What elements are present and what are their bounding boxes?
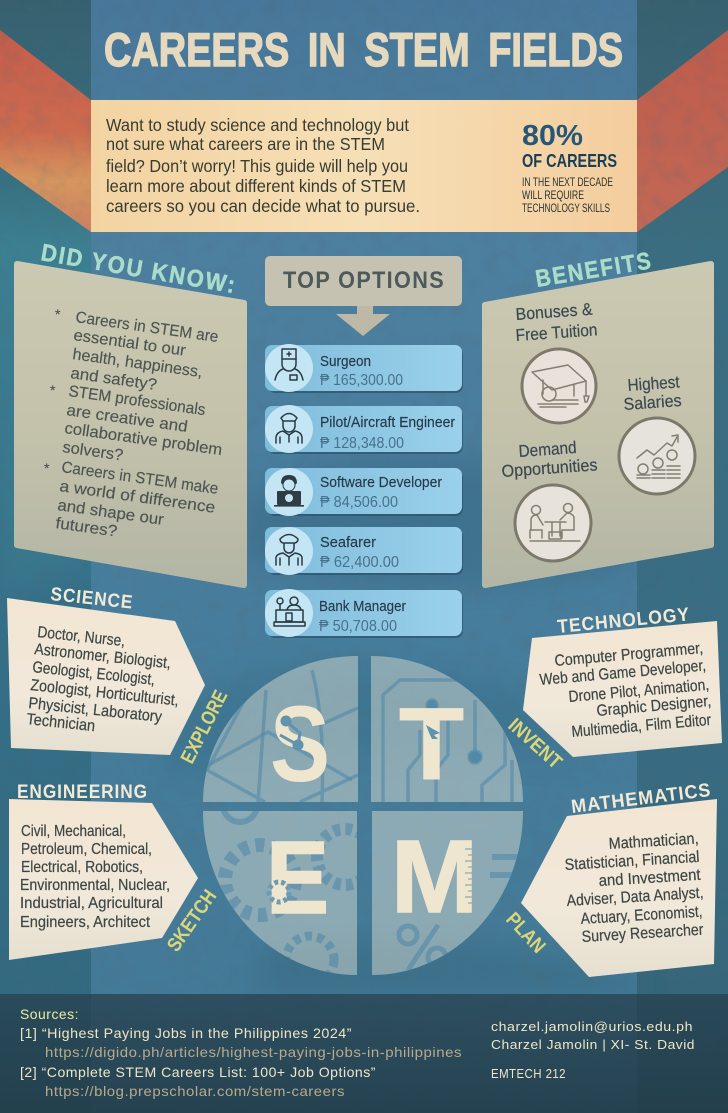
benefit: demand opportunities <box>501 438 598 561</box>
sources: [1] “Highest Paying Jobs in the Philippines 2024” <box>20 1025 352 1041</box>
benefit: bonuses and free tuition: Free Tuition <box>515 320 598 345</box>
icon: pilot <box>276 414 302 443</box>
engineering careers <box>20 823 170 931</box>
seafarer label: Seafarer <box>320 534 376 551</box>
science heading: SCIENCE <box>49 584 134 614</box>
engineering careers: Engineers, Architect <box>20 914 151 931</box>
statistic: 80% of careers: WILL REQUIRE <box>522 188 584 202</box>
statistic: 80% of careers: IN THE NEXT DECADE <box>522 175 613 189</box>
surgeon label: Surgeon <box>320 353 371 370</box>
quadrant E <box>203 811 357 975</box>
mathematics heading: MATHEMATICS <box>570 780 713 818</box>
card: pilot <box>265 405 463 454</box>
did you know list: Careers in STEM are <box>74 309 220 346</box>
intro text: field? Don’t worry! This guide will help you <box>106 156 408 176</box>
engineering careers: Electrical, Robotics, <box>21 859 143 876</box>
mathematics careers <box>564 831 705 946</box>
sources: https://digido.ph/articles/highest-paying-jobs-in-philippines <box>45 1044 462 1060</box>
card: seafarer <box>265 527 463 575</box>
science careers: Geologist, Ecologist, <box>32 659 156 689</box>
mathematics careers: Actuary, Economist, <box>580 904 703 928</box>
statistic: 80% of careers: TECHNOLOGY SKILLS <box>522 201 610 215</box>
icon: seafarer <box>276 534 302 565</box>
engineering careers: Civil, Mechanical, <box>21 823 126 840</box>
intro text <box>106 115 420 216</box>
icon: developer at laptop <box>274 475 304 507</box>
mathematics careers: Adviser, Data Analyst, <box>566 885 704 910</box>
quadrant S <box>203 656 358 804</box>
icon: graduation cap and coins <box>532 365 589 407</box>
arrow down <box>336 306 390 336</box>
bank manager label: Bank Manager <box>319 598 406 615</box>
icon: surgeon <box>275 349 303 380</box>
panel: benefits <box>485 247 711 585</box>
benefit: demand opportunities: Opportunities <box>501 455 598 481</box>
panel: did you know <box>17 239 244 585</box>
engineering careers: Industrial, Agricultural <box>20 895 163 912</box>
developer salary: ₱ 84,506.00 <box>320 494 398 511</box>
left red chevron <box>0 30 91 232</box>
intro text: not sure what careers are in the STEM <box>106 134 385 154</box>
benefit: bonuses and free tuition <box>515 300 598 423</box>
did you know list: * <box>44 460 50 476</box>
technology careers: Graphic Designer, <box>596 693 712 720</box>
intro text: careers so you can decide what to pursue. <box>106 196 420 216</box>
STEM circle <box>203 656 530 984</box>
did you know heading: DID YOU KNOW: <box>39 239 239 299</box>
engineering heading: ENGINEERING <box>17 782 148 803</box>
panel: top options <box>265 256 462 336</box>
science careers: Astronomer, Biologist, <box>34 641 172 672</box>
panel: technology <box>504 604 722 774</box>
did you know list: health, happiness, <box>71 346 204 381</box>
sketch label: SKETCH <box>163 886 221 956</box>
benefit: bonuses and free tuition: Bonuses & <box>515 300 594 324</box>
developer label: Software Developer <box>320 474 442 491</box>
science careers: Technician <box>26 711 96 735</box>
science careers: Physicist, Laboratory <box>28 695 163 726</box>
footer <box>0 994 728 1113</box>
did you know list: and shape our <box>56 497 165 529</box>
mathematics careers: Mathmatician, <box>608 831 699 853</box>
top options heading: TOP OPTIONS <box>283 267 445 294</box>
technology careers: Computer Programmer, <box>554 640 704 670</box>
explore label: EXPLORE <box>177 687 232 767</box>
pilot label: Pilot/Aircraft Engineer <box>320 414 455 431</box>
author credits: EMTECH 212 <box>491 1066 566 1081</box>
surgeon salary: ₱ 165,300.00 <box>320 372 403 389</box>
technology heading: TECHNOLOGY <box>556 604 691 638</box>
did you know list: essential to our <box>72 327 187 360</box>
icon: people at a table <box>530 504 580 541</box>
sources: https://blog.prepscholar.com/stem-careers <box>45 1083 345 1099</box>
did you know list: collaborative problem <box>63 420 223 459</box>
benefits heading: BENEFITS <box>534 247 654 293</box>
did you know list <box>44 306 223 541</box>
statistic: 80% of careers: 80% <box>522 120 583 152</box>
did you know list: solvers? <box>61 439 124 464</box>
author credits <box>491 1019 695 1081</box>
science careers: Zoologist, Horticulturist, <box>30 677 180 710</box>
science careers <box>26 624 180 735</box>
panel: mathematics <box>501 780 717 977</box>
panel: intro <box>91 100 637 232</box>
mathematics careers: Statistician, Financial <box>564 849 700 874</box>
panel: science <box>7 584 232 767</box>
benefit: highest salaries: Highest <box>627 372 680 395</box>
quadrant T <box>371 656 523 802</box>
sources: Sources: <box>20 1006 79 1022</box>
did you know list: are creative and <box>65 402 189 436</box>
did you know list: Careers in STEM make <box>60 459 219 498</box>
sources: [2] “Complete STEM Careers List: 100+ Job Options” <box>20 1064 376 1080</box>
did you know list: and safety? <box>69 365 158 394</box>
letter S: S <box>270 683 330 804</box>
did you know list: a world of difference <box>58 478 216 517</box>
letter E: E <box>266 820 329 935</box>
author credits: Charzel Jamolin | XI- St. David <box>491 1037 695 1052</box>
card: software developer <box>265 468 463 516</box>
invent label: INVENT <box>504 714 566 774</box>
benefit: highest salaries <box>619 372 695 494</box>
intro text: Want to study science and technology but <box>106 115 409 135</box>
did you know list: futures? <box>54 515 118 541</box>
technology careers <box>539 640 712 741</box>
quadrant M <box>372 811 530 975</box>
statistic: 80% of careers <box>522 120 617 215</box>
card: surgeon <box>265 344 463 393</box>
engineering careers: Petroleum, Chemical, <box>21 841 152 858</box>
icon: growth chart and coins <box>637 435 680 478</box>
panel: engineering <box>9 782 221 960</box>
science careers: Doctor, Nurse, <box>37 624 126 650</box>
did you know list: STEM professionals <box>67 383 206 419</box>
engineering careers: Environmental, Nuclear, <box>20 877 170 894</box>
benefit: highest salaries: Salaries <box>623 391 682 414</box>
intro text: learn more about different kinds of STEM <box>106 176 406 196</box>
letter M: M <box>391 819 478 934</box>
card: bank manager <box>265 589 463 638</box>
right red chevron <box>637 30 728 232</box>
technology careers: Drone Pilot, Animation, <box>568 677 710 706</box>
benefit: demand opportunities: Demand <box>518 438 577 461</box>
statistic: 80% of careers: OF CAREERS <box>522 151 617 171</box>
technology careers: Web and Game Developer, <box>539 657 707 689</box>
did you know list: * <box>50 382 56 398</box>
plan label: PLAN <box>501 908 549 958</box>
mathematics careers: and Investment <box>598 867 702 890</box>
icon: bank manager <box>274 597 305 626</box>
bank manager salary: ₱ 50,708.00 <box>319 618 397 635</box>
author credits: charzel.jamolin@urios.edu.ph <box>491 1019 693 1034</box>
sources <box>20 1006 462 1099</box>
did you know list: * <box>55 306 61 322</box>
seafarer salary: ₱ 62,400.00 <box>320 554 399 571</box>
mathematics careers: Survey Researcher <box>581 922 705 946</box>
letter T: T <box>399 687 464 801</box>
pilot salary: ₱ 128,348.00 <box>320 435 404 452</box>
